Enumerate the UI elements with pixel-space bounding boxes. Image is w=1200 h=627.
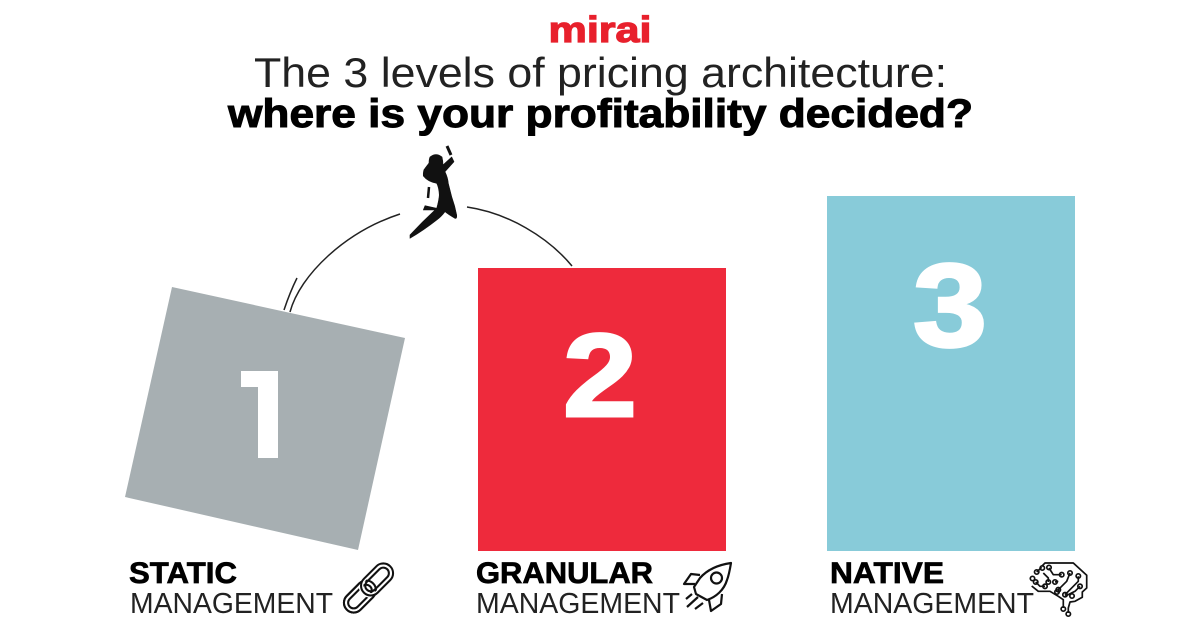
label: native management: MANAGEMENT bbox=[830, 588, 1034, 620]
icon: rocket bbox=[684, 563, 731, 611]
label: static management: MANAGEMENT bbox=[130, 588, 333, 620]
label: static management bbox=[129, 557, 333, 620]
number 3: 3 bbox=[913, 240, 987, 372]
label: native management bbox=[830, 557, 1034, 620]
icon: chain link bbox=[342, 562, 394, 614]
label: granular management: MANAGEMENT bbox=[476, 588, 680, 620]
logo: mirai: mirai bbox=[548, 9, 652, 50]
block 3: native bbox=[827, 196, 1075, 551]
jump arc bbox=[284, 207, 572, 312]
icon: circuit brain bbox=[1030, 563, 1087, 616]
label: native management: NATIVE bbox=[830, 557, 944, 590]
label: static management: STATIC bbox=[129, 557, 237, 590]
title line 1: The 3 levels of pricing architecture: bbox=[254, 49, 947, 96]
title line 2: where is your profitability decided? bbox=[227, 92, 973, 136]
icon: jumping woman silhouette bbox=[410, 146, 457, 238]
number 1: 1 bbox=[227, 346, 297, 485]
label: granular management bbox=[476, 557, 680, 620]
label: granular management: GRANULAR bbox=[476, 557, 653, 590]
block 2: granular bbox=[478, 268, 726, 551]
number 2: 2 bbox=[563, 310, 637, 442]
block 1: static bbox=[125, 287, 405, 550]
